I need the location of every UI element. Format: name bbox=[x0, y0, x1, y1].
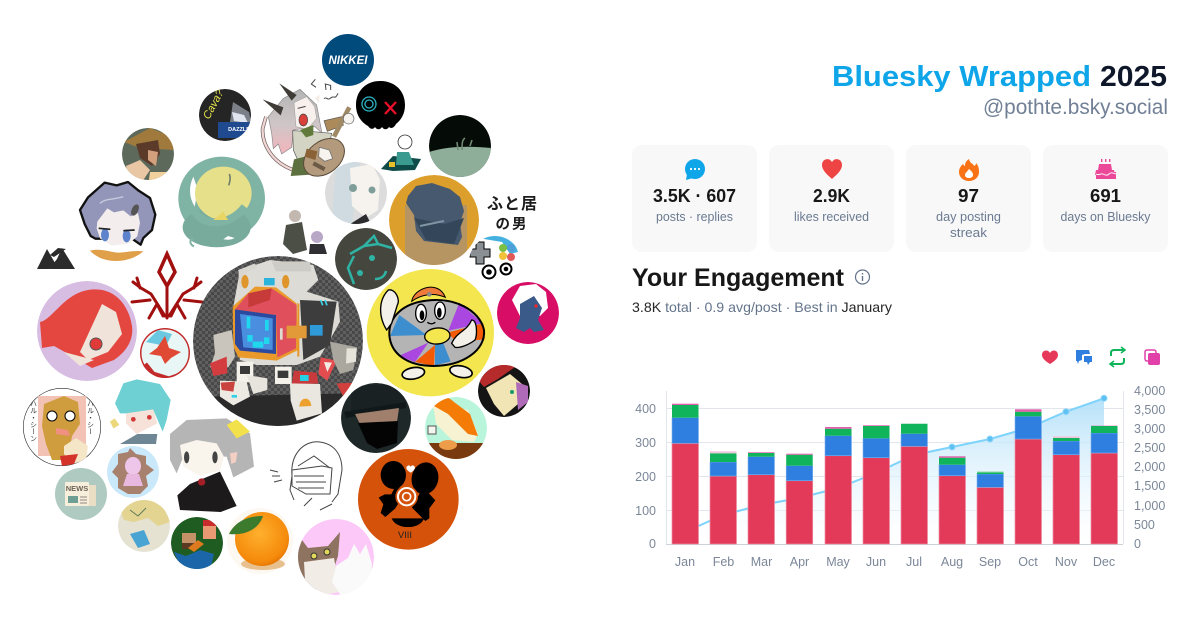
avatar: teal hair character bbox=[110, 379, 171, 444]
avatar: octopus on light blue bbox=[107, 446, 159, 498]
avatar: orange tarot VIII bbox=[358, 449, 459, 550]
stat card: streak: day posting bbox=[936, 210, 1001, 224]
avatar: elf bbox=[325, 162, 387, 224]
stat card: days on Bluesky: 691 bbox=[1090, 186, 1121, 206]
stat card: posts and replies: posts · replies bbox=[656, 210, 733, 224]
icon: speech bubble bbox=[685, 159, 705, 180]
stat card: streak bbox=[906, 145, 1031, 252]
month labels: Jan bbox=[675, 555, 695, 569]
avatar: teal robot on dark bbox=[335, 228, 397, 290]
avatar: masked man bbox=[341, 383, 411, 453]
handle: @pothte.bsky.social bbox=[983, 96, 1168, 119]
stacked bars: quotes bbox=[672, 404, 1118, 472]
stacked bars: reposts bbox=[672, 405, 1118, 474]
avatar: tan creature: ハル・シーン bbox=[30, 400, 37, 442]
avatar: orange tarot VIII: VIII bbox=[398, 530, 412, 540]
avatar: game controller face bbox=[470, 236, 518, 280]
stat card: days on Bluesky bbox=[1043, 145, 1168, 252]
avatar: minecraft forest bbox=[171, 517, 223, 570]
chart legend bbox=[1042, 347, 1160, 367]
stacked bars: replies bbox=[672, 416, 1118, 487]
month labels: Aug bbox=[941, 555, 963, 569]
stat card: streak: 97 bbox=[958, 186, 979, 206]
cumulative line bbox=[685, 395, 1107, 532]
stat card: streak: streak bbox=[950, 226, 988, 240]
left axis labels: 300 bbox=[635, 436, 656, 450]
avatar: small suited figures bbox=[283, 210, 327, 254]
avatar: black skull bbox=[356, 81, 405, 129]
avatar: owl and wolf bbox=[298, 519, 374, 595]
avatar: magenta pixel creature bbox=[497, 282, 559, 344]
avatar: sketch hand bbox=[118, 498, 170, 552]
stat card: likes: likes received bbox=[794, 210, 869, 224]
avatar: dark green seabed bbox=[429, 115, 491, 178]
combo chart bbox=[635, 384, 1165, 569]
icon: heart bbox=[822, 159, 842, 179]
avatar: lute player bbox=[263, 79, 354, 184]
title: Bluesky Wrapped bbox=[832, 61, 1091, 93]
text avatar: futo-kutsu bbox=[487, 190, 537, 234]
avatar: tan creature bbox=[23, 388, 101, 466]
icon: quotes bbox=[1145, 350, 1160, 365]
right axis labels: 4,000 bbox=[1134, 384, 1165, 398]
avatar cluster bbox=[23, 34, 559, 600]
icon: flame bbox=[959, 159, 979, 181]
right axis labels: 2,000 bbox=[1134, 460, 1165, 474]
icon: info bbox=[856, 270, 870, 284]
stat card: posts and replies bbox=[632, 145, 757, 252]
stat card: likes bbox=[769, 145, 894, 252]
right axis labels: 3,000 bbox=[1134, 422, 1165, 436]
right axis labels: 500 bbox=[1134, 518, 1155, 532]
left axis labels bbox=[635, 402, 656, 551]
grid lines and axes bbox=[666, 391, 1124, 544]
month labels: May bbox=[826, 555, 851, 569]
left axis labels: 0 bbox=[649, 537, 656, 551]
right axis labels: 0 bbox=[1134, 537, 1141, 551]
avatar: Nikkei logo: NIKKEI bbox=[329, 55, 368, 67]
avatar: purple hair character bbox=[80, 182, 155, 261]
avatar: red hood bbox=[478, 365, 530, 417]
avatar: Cava dark badge: DAZZLE bbox=[228, 127, 250, 133]
text avatar: futo-kutsu: ふと居 bbox=[487, 190, 537, 214]
month labels: Apr bbox=[790, 555, 809, 569]
cumulative area bbox=[685, 398, 1104, 544]
avatar: news icon: NEWS bbox=[66, 484, 88, 493]
avatar: Cava dark badge bbox=[199, 87, 252, 141]
right axis labels: 1,000 bbox=[1134, 499, 1165, 513]
month labels: Jun bbox=[866, 555, 886, 569]
avatar: red hair character bbox=[37, 281, 137, 381]
avatar: red flower badge bbox=[140, 328, 190, 379]
avatar: main robot bbox=[193, 256, 363, 427]
stat card: likes: 2.9K bbox=[813, 186, 850, 206]
icon: replies bbox=[1076, 350, 1092, 365]
month labels: Jul bbox=[906, 555, 922, 569]
left axis labels: 100 bbox=[635, 504, 656, 518]
avatar: orange bird bbox=[425, 396, 487, 459]
avatar: yellow wheel character bbox=[367, 269, 494, 396]
avatar: brown hat figure bbox=[122, 128, 174, 180]
month labels: Nov bbox=[1055, 555, 1078, 569]
month labels: Dec bbox=[1093, 555, 1115, 569]
stacked bars: likes bbox=[672, 439, 1118, 544]
month labels: Sep bbox=[979, 555, 1001, 569]
avatar: news icon bbox=[55, 468, 107, 520]
avatar: rock on wood bbox=[389, 175, 479, 265]
avatar: tan creature: ハル・シー bbox=[86, 400, 94, 435]
right axis labels: 1,500 bbox=[1134, 479, 1165, 493]
avatar: orange fruit bbox=[227, 508, 293, 574]
right axis labels: 3,500 bbox=[1134, 403, 1165, 417]
icon: likes bbox=[1042, 351, 1058, 364]
left axis labels: 200 bbox=[635, 470, 656, 484]
avatar: red emblem bbox=[132, 254, 202, 318]
stat card: days on Bluesky: days on Bluesky bbox=[1060, 210, 1151, 224]
avatar: line art mask face bbox=[270, 442, 342, 510]
month labels: Feb bbox=[713, 555, 734, 569]
avatar: snake and apple bbox=[178, 157, 265, 247]
right axis labels bbox=[1134, 384, 1165, 551]
left axis labels: 400 bbox=[635, 402, 656, 416]
right axis labels: 2,500 bbox=[1134, 441, 1165, 455]
icon: reposts bbox=[1110, 347, 1125, 367]
title: 2025 bbox=[1100, 61, 1167, 93]
icon: cake bbox=[1095, 159, 1116, 179]
month labels: Oct bbox=[1018, 555, 1038, 569]
avatar: Cava dark badge: Cava? bbox=[201, 87, 227, 121]
engagement summary: 3.8K total · 0.9 avg/post · Best in January bbox=[632, 299, 892, 315]
avatar: gray pixel character bbox=[170, 418, 254, 512]
month labels: Mar bbox=[751, 555, 772, 569]
engagement heading: Your Engagement bbox=[632, 264, 845, 292]
avatar: small sitting figure bbox=[381, 135, 421, 171]
avatar: Nikkei logo bbox=[322, 34, 374, 86]
month labels bbox=[675, 555, 1115, 569]
text avatar: futo-kutsu: の男 bbox=[496, 213, 526, 234]
stat card: posts and replies: 3.5K · 607 bbox=[653, 186, 736, 206]
avatar: black triangles logo bbox=[37, 248, 75, 269]
